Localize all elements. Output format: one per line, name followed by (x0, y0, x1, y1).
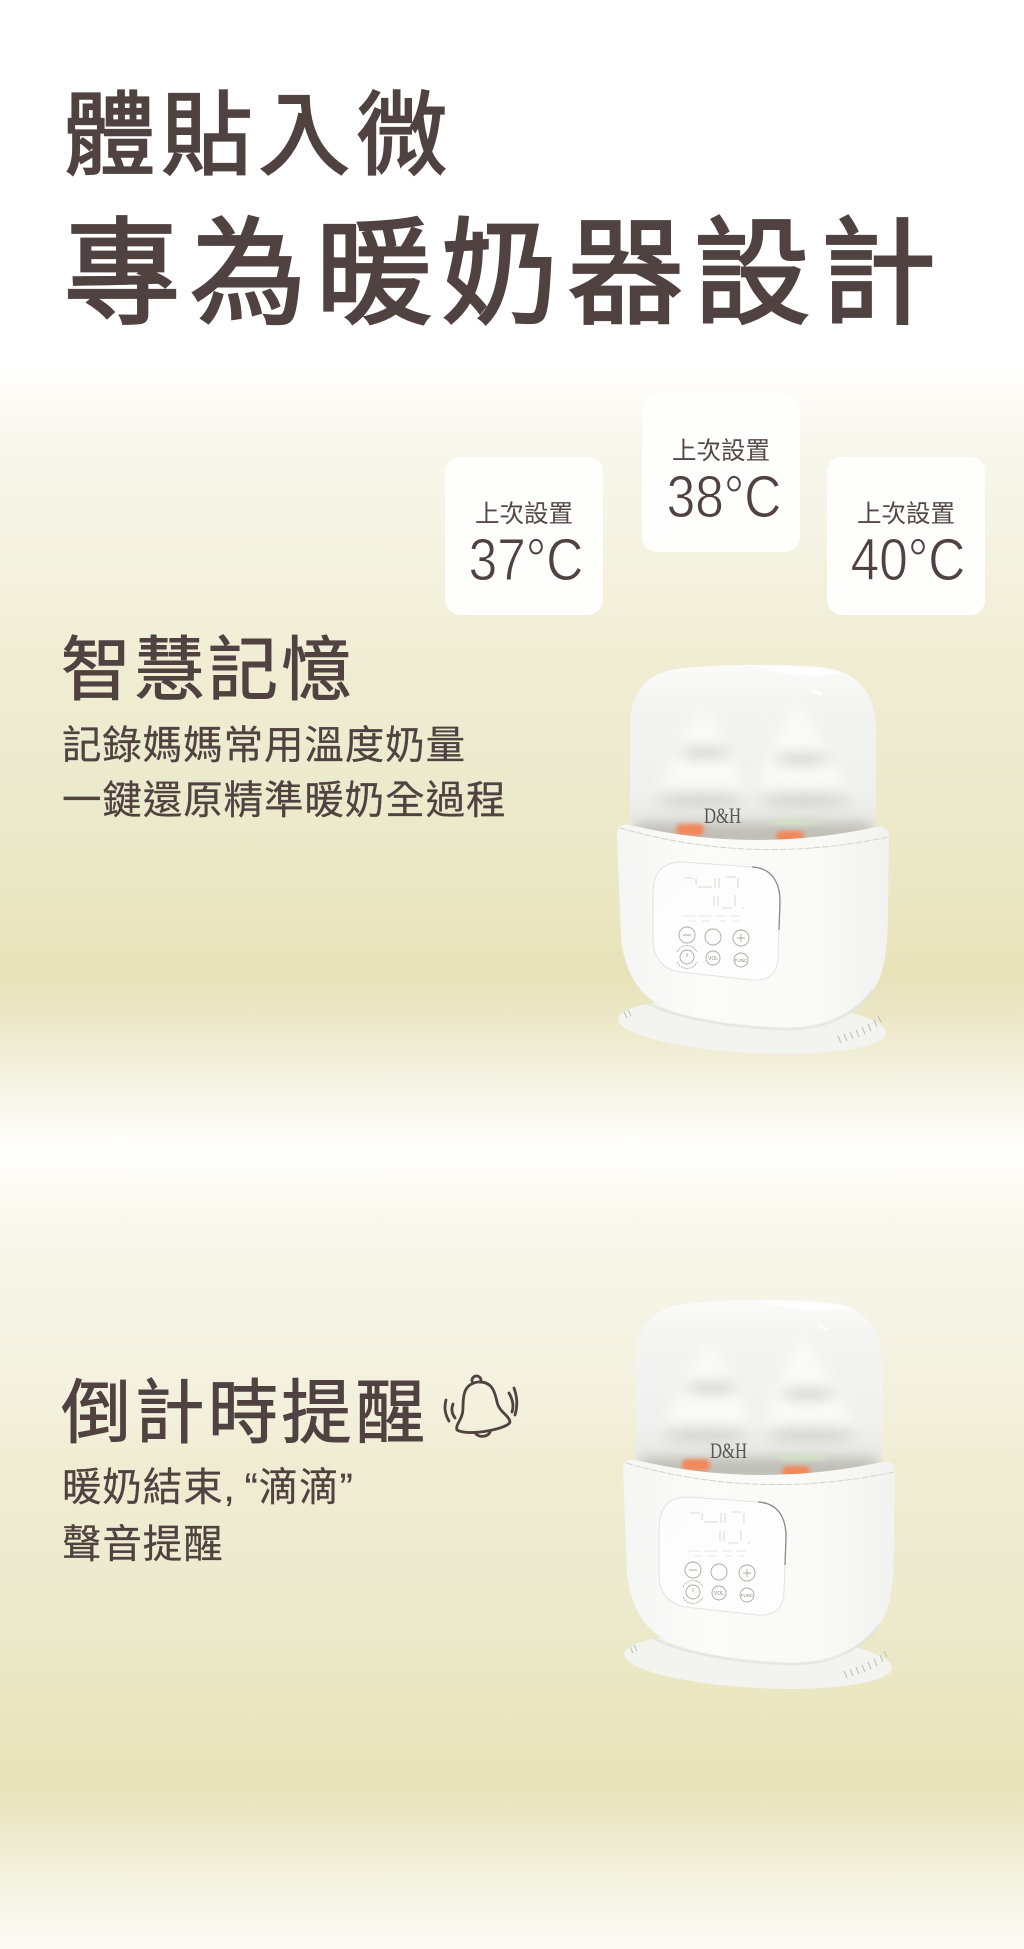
title line 1: 體貼入微 (64, 62, 454, 194)
control panel: VOL (708, 956, 718, 962)
logo: D&H (710, 1438, 747, 1463)
control panel (659, 1497, 786, 1615)
text block: countdown description: 暖奶結束,“滴滴” (62, 1456, 354, 1513)
card: last setting 40°C (827, 457, 985, 615)
card: last setting 40°C: 上次設置 (857, 495, 955, 530)
frosted lid with blurred bottles (636, 1300, 882, 1482)
heading: smart memory: 智慧記憶 (61, 614, 355, 715)
product image: bottle warmer, countdown reminder (623, 1300, 895, 1695)
product image: bottle warmer, smart memory (617, 665, 889, 1060)
control panel (653, 862, 780, 980)
card: last setting 37°C: 37°C (469, 527, 583, 593)
warmer body (623, 1460, 895, 1664)
heading: countdown reminder: 倒計時提醒 (61, 1357, 428, 1458)
text block: smart memory description: 記錄媽媽常用溫度奶量 (62, 714, 466, 771)
title line 2: 專為暖奶器設計 (64, 180, 946, 348)
text block: smart memory description: 一鍵還原精準暖奶全過程 (62, 768, 506, 826)
control panel: VOL (714, 1591, 724, 1597)
text block: countdown description (62, 1456, 354, 1570)
card: last setting 38°C: 38°C (667, 464, 781, 530)
icon: ringing bell (445, 1376, 517, 1436)
logo: D&H (704, 803, 741, 828)
warmer body (617, 825, 889, 1029)
card: last setting 38°C (642, 394, 800, 552)
text block: smart memory description (62, 714, 506, 826)
control panel: FUNC (735, 958, 748, 963)
base plate (623, 1627, 893, 1695)
card: last setting 37°C (445, 457, 603, 615)
frosted lid with blurred bottles (630, 665, 876, 847)
control panel: FUNC (741, 1593, 754, 1598)
card: last setting 40°C: 40°C (851, 527, 965, 593)
card: last setting 38°C: 上次設置 (672, 432, 770, 467)
text block: countdown description: 聲音提醒 (62, 1513, 224, 1570)
base plate (617, 992, 887, 1060)
card: last setting 37°C: 上次設置 (475, 495, 573, 530)
